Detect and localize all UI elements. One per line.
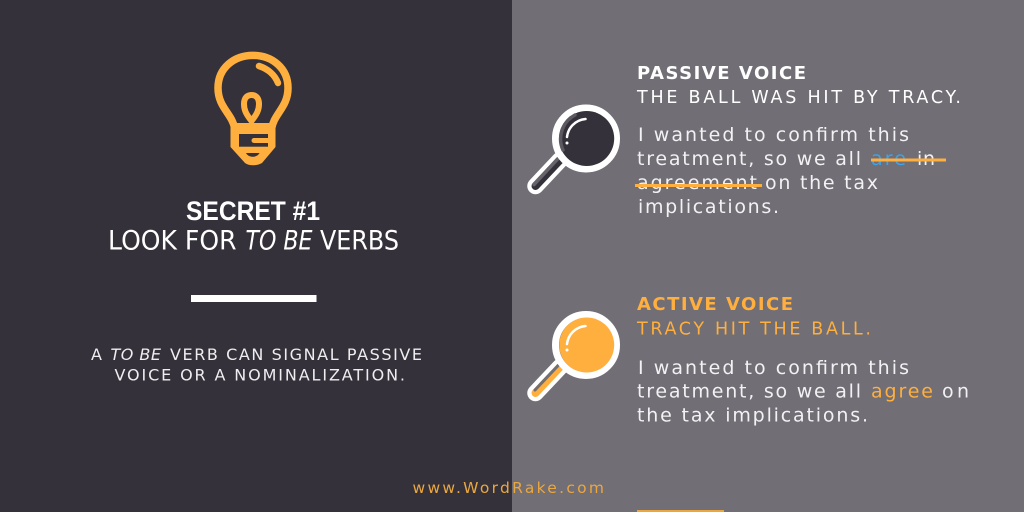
text block: to be explanation [91,345,422,385]
example: active sentence: TRACY HIT THE BALL. [636,319,871,339]
paragraph: active example: treatment, so we all [637,381,861,403]
divider bar [191,295,316,302]
heading: look for to be verbs [108,226,399,256]
paragraph: active example [637,357,969,427]
paragraph: active example: the tax implications. [637,405,868,427]
icon: magnifying glass, orange [535,314,616,393]
label: active voice: ACTIVE VOICE [637,294,793,315]
heading: look for to be verbs: TO BE [246,226,312,256]
paragraph: passive example: on the tax [765,172,878,194]
paragraph: passive example: are [871,148,906,170]
heading: look for to be verbs: LOOK FOR [108,226,236,256]
icon: magnifying glass, dark [534,108,616,186]
paragraph: active example: agree [871,381,933,403]
paragraph: passive example: I wanted to confirm this [638,124,909,146]
text block: to be explanation: A [91,345,102,364]
example: passive sentence: THE BALL WAS HIT BY TRACY. [636,88,961,108]
text block: passive voice [635,63,961,218]
text block: to be explanation: VERB CAN SIGNAL PASSIVE [170,345,422,364]
panel: left dark background [0,0,512,512]
paragraph: passive example: implications. [638,196,779,218]
paragraph: passive example: agreement [637,172,757,194]
text block: active voice [636,294,969,427]
heading: secret number: SECRET #1 [186,196,320,226]
text block: to be explanation: TO BE [110,345,162,364]
label: passive voice: PASSIVE VOICE [637,63,806,84]
paragraph: passive example [637,124,935,218]
panel: right grey background [512,0,1024,512]
heading: look for to be verbs: VERBS [320,226,399,256]
text block: to be explanation: VOICE OR A NOMINALIZATION. [114,366,405,385]
paragraph: active example: on [942,381,969,403]
icon: light bulb [218,55,288,165]
footer: website url: www.WordRake.com [412,479,604,497]
paragraph: active example: I wanted to confirm this [638,357,909,379]
strikethrough: agreement [635,184,762,187]
strikethrough: are in [871,158,946,162]
paragraph: passive example: in [917,148,935,170]
accent bar at bottom edge [637,510,724,512]
paragraph: passive example: treatment, so we all [637,148,861,170]
